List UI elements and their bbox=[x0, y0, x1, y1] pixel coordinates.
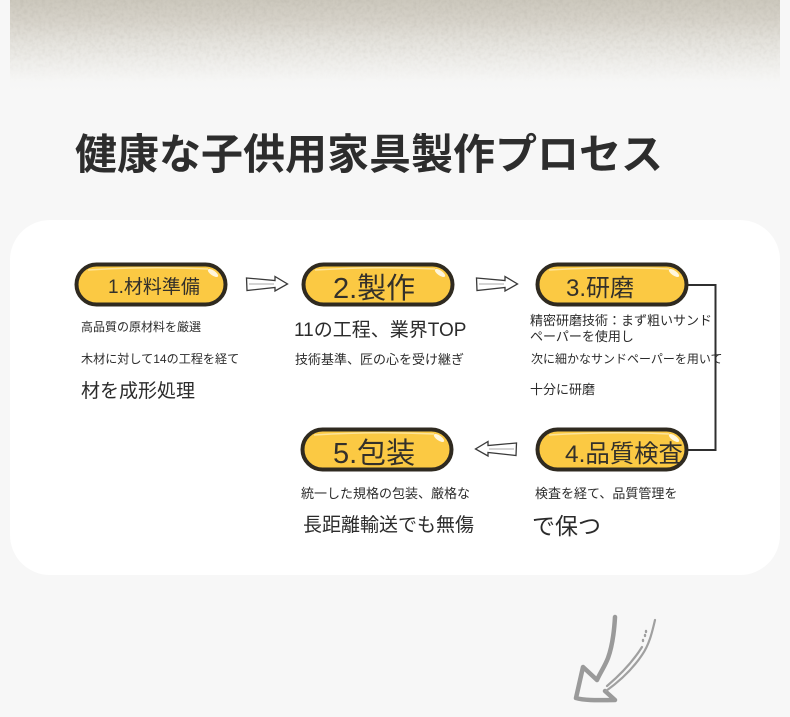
header texture band bbox=[10, 0, 780, 76]
connector: step 3 to step 4 bbox=[688, 284, 716, 451]
step 3 pill bbox=[536, 262, 688, 306]
step 1 description bbox=[81, 320, 239, 402]
title: 健康な子供用家具製作プロセス bbox=[75, 131, 663, 178]
step 5 label: 5.包装 bbox=[333, 438, 415, 470]
panel: process card bbox=[10, 220, 780, 575]
step 4 description: 検査を経て、品質管理を bbox=[535, 486, 677, 501]
step 3 description: 十分に研磨 bbox=[530, 382, 595, 397]
arrow: step 1 to step 2 bbox=[246, 275, 289, 292]
step 5 pill bbox=[300, 428, 454, 472]
step 3 description: 次に細かなサンドペーパーを用いて bbox=[531, 352, 723, 366]
step 5 description: 長距離輸送でも無傷 bbox=[303, 515, 474, 536]
step 2 pill bbox=[302, 262, 454, 306]
step 2 label: 2.製作 bbox=[333, 273, 415, 305]
arrow: step 2 to step 3 bbox=[476, 275, 519, 292]
arrow: step 4 to step 5 bbox=[474, 440, 518, 458]
step 2 description: 11の工程、業界TOP bbox=[294, 320, 466, 341]
step 1 description: 高品質の原材料を厳選 bbox=[81, 320, 201, 334]
step 4 pill bbox=[536, 428, 688, 472]
step 5 description bbox=[301, 486, 474, 536]
step 3 description: 精密研磨技術：まず粗いサンド bbox=[530, 313, 712, 328]
step 2 description bbox=[294, 320, 466, 367]
icon: hand-drawn down arrow bbox=[574, 614, 656, 702]
step 1 pill bbox=[74, 262, 228, 306]
step 3 description: ペーパーを使用し bbox=[530, 329, 634, 344]
step 4 description bbox=[532, 486, 677, 539]
step 5 description: 統一した規格の包装、厳格な bbox=[301, 486, 470, 501]
step 3 description bbox=[530, 313, 723, 397]
step 1 description: 材を成形処理 bbox=[81, 381, 195, 402]
step 4 description: で保つ bbox=[532, 513, 601, 539]
step 4 label: 4.品質検査 bbox=[565, 441, 683, 468]
step 1 label: 1.材料準備 bbox=[108, 277, 200, 298]
step 1 description: 木材に対して14の工程を経て bbox=[81, 352, 239, 366]
step 2 description: 技術基準、匠の心を受け継ぎ bbox=[295, 352, 464, 367]
step 3 label: 3.研磨 bbox=[566, 275, 634, 302]
